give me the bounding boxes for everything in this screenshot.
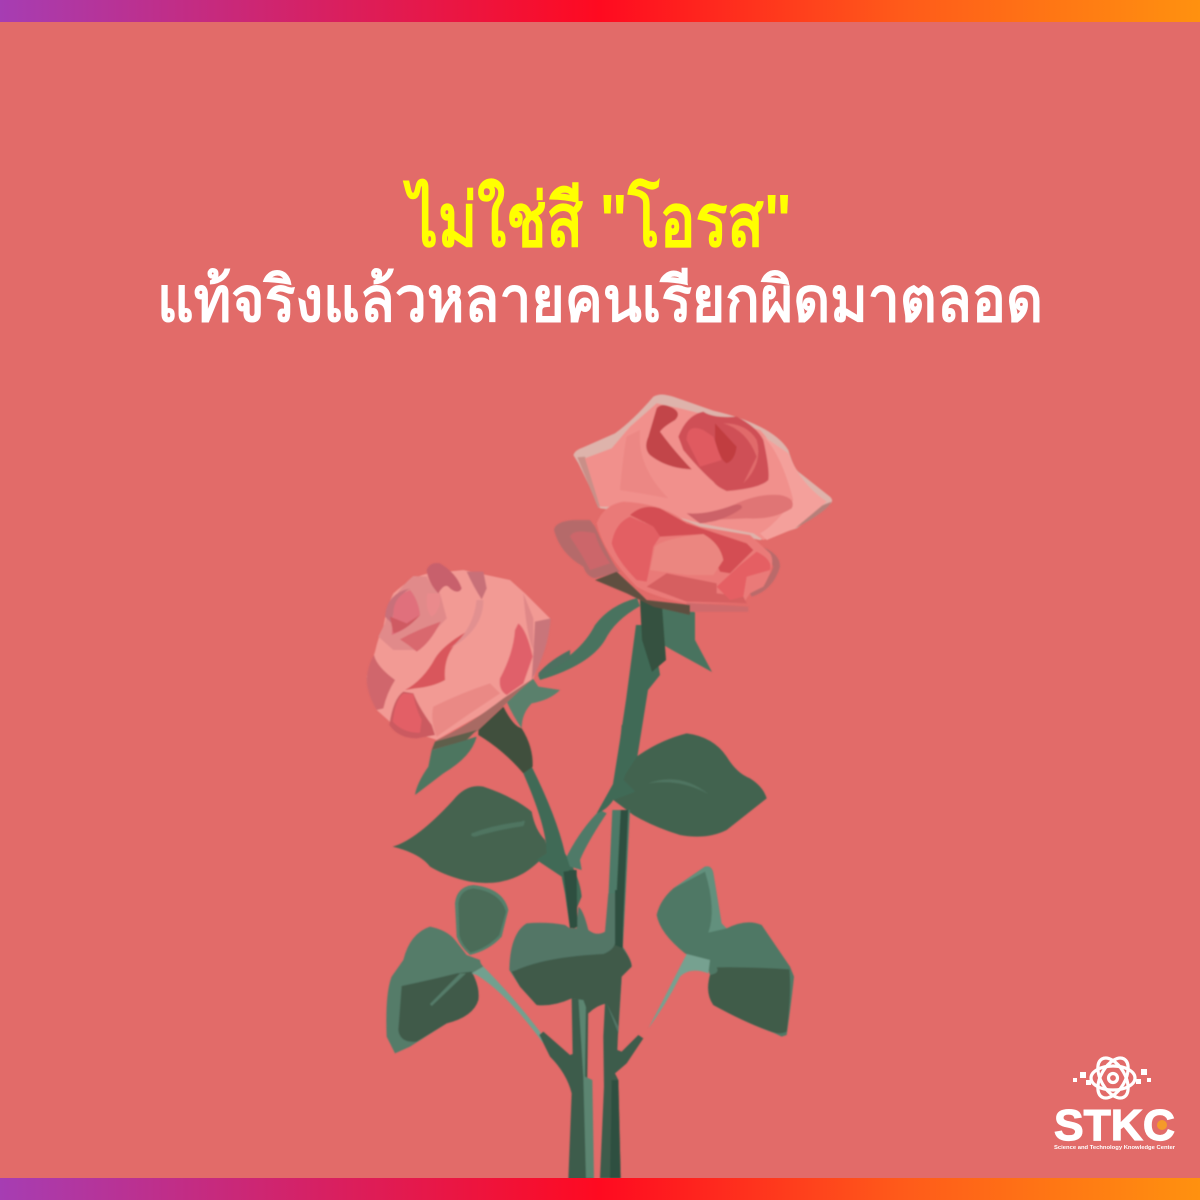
lower left rose xyxy=(367,563,570,795)
round top leaf inner xyxy=(458,888,506,953)
right lower leaf xyxy=(648,866,794,1037)
stems and leaves group xyxy=(393,720,767,928)
central leaf xyxy=(509,870,632,1033)
lower fold xyxy=(432,683,500,737)
olive shadow xyxy=(432,730,477,750)
top dark petal xyxy=(427,563,462,593)
bottom gradient bar xyxy=(0,1178,1200,1200)
right strip xyxy=(523,593,533,650)
left flower stem xyxy=(523,767,582,928)
lower right stem xyxy=(600,973,643,1178)
pale outer petals xyxy=(573,395,832,540)
icon: atom xyxy=(1091,1053,1135,1103)
right stem middle xyxy=(607,810,630,950)
bottom shadow xyxy=(433,678,533,750)
lower left stem xyxy=(539,997,594,1180)
brown sepal overlap xyxy=(595,572,690,615)
main pink body xyxy=(585,403,827,540)
lower leaves and stems group xyxy=(386,810,794,1180)
dark calyx xyxy=(478,707,533,773)
left thin stem xyxy=(472,967,543,1043)
title: ไม่ใช่สี "โอรส" xyxy=(402,177,792,262)
right main stem upper xyxy=(612,600,666,790)
stem leaf xyxy=(538,650,570,677)
logo wordmark: STKC xyxy=(1054,1101,1175,1150)
round top leaf xyxy=(455,885,508,955)
main petals xyxy=(367,570,550,740)
logo: STKC xyxy=(1054,1053,1176,1151)
left dark petal xyxy=(367,655,395,710)
bottom sepal xyxy=(415,737,477,795)
lower bowl petal xyxy=(597,502,772,612)
right red fold xyxy=(500,623,533,695)
back grey petal xyxy=(554,520,620,578)
grey tip shadow xyxy=(795,502,832,528)
dark red inner petal xyxy=(646,405,692,469)
orange dot xyxy=(1157,1120,1167,1130)
left large leaf xyxy=(393,786,548,883)
right large leaf xyxy=(613,733,767,837)
grey left strip xyxy=(577,457,602,508)
icon: pixel squares xyxy=(1073,1069,1151,1085)
upper band xyxy=(450,600,483,648)
top gradient bar xyxy=(0,0,1200,22)
center bud xyxy=(678,412,769,491)
diagonal red fold xyxy=(405,632,467,690)
right light petal xyxy=(760,435,827,540)
right sepal xyxy=(507,677,560,728)
right grey arc xyxy=(747,543,780,597)
illustration: two roses xyxy=(367,395,832,1180)
back petal inner xyxy=(570,531,610,570)
bottom left petal xyxy=(389,692,435,738)
upper right rose xyxy=(554,395,832,615)
subtitle: แท้จริงแล้วหลายคนเรียกผิดมาตลอด xyxy=(157,266,1043,335)
branch between stems xyxy=(567,810,607,870)
right stem upper section xyxy=(597,720,637,813)
bud xyxy=(378,576,447,652)
top right dark petal xyxy=(467,572,487,599)
logo tagline: Science and Technology Knowledge Center xyxy=(1054,1145,1176,1151)
middle folds xyxy=(687,495,793,523)
right grey strip xyxy=(532,618,551,680)
left lower leaf xyxy=(386,927,483,1053)
upper thin leaf and sepal xyxy=(538,598,712,680)
stem highlight xyxy=(563,871,577,928)
left darker fold xyxy=(620,430,668,498)
